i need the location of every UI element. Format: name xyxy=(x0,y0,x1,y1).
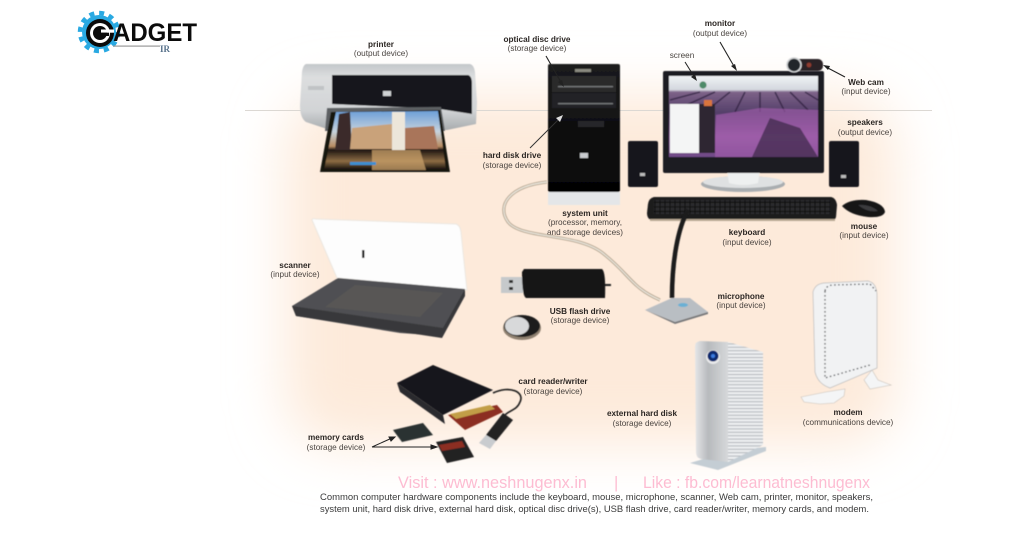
scanner base xyxy=(292,278,465,336)
label: USB flash drive: USB flash drive xyxy=(550,307,611,316)
label: monitor: (output device) xyxy=(693,29,747,38)
stand xyxy=(701,176,785,192)
device: microphone xyxy=(645,210,708,324)
arrow: web cam xyxy=(823,65,845,77)
label: screen: screen xyxy=(670,51,695,60)
USB plug xyxy=(486,413,513,441)
label: memory cards xyxy=(307,433,366,452)
label: scanner: scanner xyxy=(279,261,312,270)
label: system unit: system unit xyxy=(562,209,608,218)
label: card reader/writer: card reader/writer xyxy=(518,377,588,386)
label: mouse: (input device) xyxy=(839,231,889,240)
device: speakers xyxy=(628,141,859,187)
lavender field rows xyxy=(670,92,818,112)
arrow: screen xyxy=(685,62,697,81)
memory cards xyxy=(393,423,474,463)
label: mouse: mouse xyxy=(851,222,878,231)
label: scanner: (input device) xyxy=(270,270,320,279)
label: speakers xyxy=(838,118,892,137)
device: scanner xyxy=(292,219,467,338)
logo: Gadget IR xyxy=(80,13,197,54)
label: keyboard xyxy=(722,228,772,247)
label: modem xyxy=(803,408,894,427)
label: modem: (communications device) xyxy=(803,418,894,427)
watermark text xyxy=(398,474,871,492)
label: web cam: (input device) xyxy=(841,87,891,96)
label: memory cards: memory cards xyxy=(308,433,364,442)
label: microphone: microphone xyxy=(718,292,765,301)
label: optical disc drive xyxy=(504,35,571,53)
device: keyboard xyxy=(647,197,837,221)
device: modem xyxy=(801,281,891,404)
icon: coin xyxy=(503,315,541,340)
start menu xyxy=(670,104,699,153)
microphone cable xyxy=(504,182,660,300)
device: web cam xyxy=(787,58,823,72)
label: printer: printer xyxy=(368,40,395,49)
label: card reader/writer xyxy=(518,377,588,396)
scanner glass xyxy=(325,285,443,317)
horizontal rule xyxy=(245,110,932,111)
arrow: monitor xyxy=(720,42,737,71)
label: USB flash drive xyxy=(550,307,611,325)
arrow: hard disk drive xyxy=(530,115,563,148)
scanner lid xyxy=(312,219,467,290)
label: printer xyxy=(354,40,408,58)
label: scanner xyxy=(270,261,320,279)
label: speakers: (output device) xyxy=(838,128,892,137)
label: card reader/writer: (storage device) xyxy=(524,387,583,396)
label: microphone: (input device) xyxy=(716,301,766,310)
label: keyboard: keyboard xyxy=(729,228,765,237)
label: hard disk drive: hard disk drive xyxy=(483,151,542,160)
logo wordmark: ADGET xyxy=(113,19,197,47)
logo suffix: IR xyxy=(160,44,171,54)
arrows: memory cards xyxy=(372,437,437,449)
watermark text: Like : fb.com/learnatneshnugenx xyxy=(643,474,871,492)
label: external hard disk: (storage device) xyxy=(613,419,672,428)
label: system unit: (processor, memory, xyxy=(548,218,622,227)
caption: system unit, hard disk drive, external hard disk, optical disc drive(s), USB flash drive, card reader/writer, memory cards, and modem. xyxy=(320,504,869,514)
label: system unit xyxy=(547,209,623,237)
label: memory cards: (storage device) xyxy=(307,443,366,452)
label: web cam xyxy=(841,78,891,96)
watermark text: Visit : www.neshnugenx.in xyxy=(398,474,587,492)
icon: gear xyxy=(80,13,118,51)
label: USB flash drive: (storage device) xyxy=(551,316,610,325)
label: optical disc drive: (storage device) xyxy=(508,44,567,53)
device: monitor xyxy=(663,71,824,192)
device: system unit tower xyxy=(548,64,620,205)
label: keyboard: (input device) xyxy=(722,238,772,247)
device: USB flash drive xyxy=(501,269,611,298)
label: system unit: and storage devices) xyxy=(547,228,623,237)
arrow: optical disc drive xyxy=(546,56,564,87)
printed photo xyxy=(320,110,450,172)
label: optical disc drive: optical disc drive xyxy=(504,35,571,44)
label: web cam: Web cam xyxy=(848,78,884,87)
device: printer xyxy=(300,64,477,172)
label: printer: (output device) xyxy=(354,49,408,58)
device: external hard disk xyxy=(690,341,766,470)
label: monitor: monitor xyxy=(705,19,736,28)
caption: Common computer hardware components include the keyboard, mouse, microphone, scanner, Web cam, printer, monitor, speakers, xyxy=(320,492,873,502)
device: mouse xyxy=(842,200,885,217)
label: hard disk drive: (storage device) xyxy=(483,161,542,170)
label: speakers: speakers xyxy=(847,118,883,127)
label: hard disk drive xyxy=(483,151,542,170)
peach background xyxy=(285,95,895,445)
label: external hard disk: external hard disk xyxy=(607,409,677,418)
watermark text: | xyxy=(614,474,618,492)
label: microphone xyxy=(716,292,766,310)
label: modem: modem xyxy=(833,408,863,417)
label: external hard disk xyxy=(607,409,677,428)
caption xyxy=(320,492,873,514)
label: monitor xyxy=(693,19,747,38)
device: card reader/writer xyxy=(397,365,521,449)
inserted card xyxy=(448,405,503,430)
label: mouse xyxy=(839,222,889,240)
